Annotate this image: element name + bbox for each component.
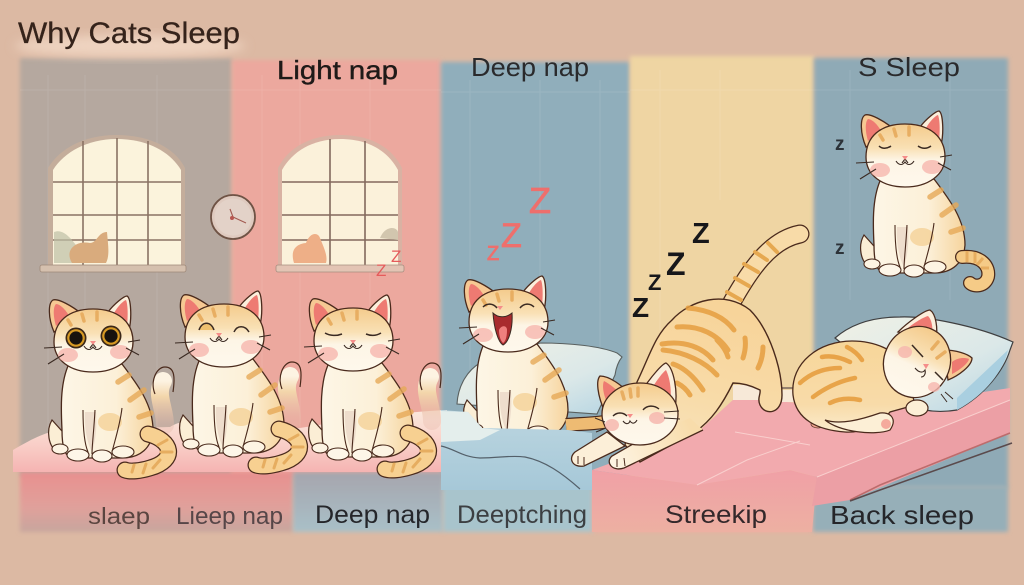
sleep letters by window: Z: [376, 261, 386, 280]
sleep letters: black: Z: [666, 246, 686, 282]
sleep letters: black: [632, 218, 710, 323]
tail: [727, 234, 800, 302]
sleep letters: red: [487, 180, 551, 265]
head: [872, 310, 972, 409]
heading: deep nap: Deep nap: [471, 52, 589, 82]
head: [595, 363, 680, 445]
near front leg: [609, 418, 703, 469]
panel: bottom strip middle: [293, 472, 443, 532]
tail: [962, 251, 989, 285]
panel: bottom strip right: [813, 486, 1008, 532]
sleep letters: top right: z: [835, 238, 844, 259]
icon: left eye: [66, 328, 86, 348]
caption: back sleep: Back sleep: [830, 500, 974, 530]
caption: lieep nap: Lieep nap: [176, 503, 283, 530]
tail: cat three back: [420, 363, 441, 421]
open mouth: [493, 313, 512, 345]
heading: sleep: S Sleep: [858, 52, 960, 82]
caption: sleep: slaep: [88, 503, 150, 529]
sleep letters: red: Z: [529, 180, 551, 221]
sleep letters: top right: [835, 134, 844, 259]
icon: wall clock: [211, 195, 255, 239]
cat: yawning: [459, 276, 568, 442]
cat: sitting on back sleep panel: [856, 111, 989, 285]
panel: back sleep column: [814, 58, 1008, 488]
panel: bottom strip deep: [443, 480, 593, 532]
body: [793, 341, 915, 432]
panel: awake column: [20, 58, 232, 476]
caption: deep nap: Deep nap: [315, 501, 430, 529]
pink foot: [811, 420, 825, 428]
body: [625, 299, 782, 462]
sleep letters: red: Z: [487, 243, 499, 265]
sleep letters by window: Z: [391, 247, 401, 266]
sleep letters: black: Z: [648, 270, 661, 295]
sleep letters by window: [376, 247, 401, 280]
sleep letters: red: Z: [501, 217, 522, 255]
panel: light nap column: [232, 60, 441, 476]
panel: bottom strip pink: [593, 480, 813, 532]
pillow: deep nap: [457, 343, 622, 414]
bed: pink mattress: [592, 385, 1012, 532]
cat: wide awake: [44, 296, 172, 473]
front paw: [906, 400, 928, 416]
window: right: [276, 135, 404, 272]
sleep letters: black: Z: [692, 218, 710, 250]
cushion: left shelf: [13, 410, 447, 472]
icon: right eye: [100, 326, 122, 346]
panel: deep nap column: [441, 62, 630, 490]
blanket: blue: [441, 410, 592, 490]
title glow: [15, 35, 245, 57]
cat: drowsy: [175, 291, 303, 468]
cat: light nap: [304, 295, 432, 472]
caption: streekip: Streekip: [665, 501, 767, 529]
cat: curled sleeping: [793, 310, 972, 433]
body stripes: [662, 308, 763, 395]
pillow: back sleep: [835, 317, 1013, 412]
tail: cat one back: [153, 367, 174, 425]
tail: yawning cat: [566, 422, 604, 425]
sleep letters: top right: z: [835, 134, 844, 155]
panel: stretching column: [630, 56, 814, 486]
window: left: [40, 135, 186, 272]
far front leg: [572, 432, 625, 466]
heading: light nap: Light nap: [277, 55, 398, 85]
caption: deeptching: Deeptching: [457, 501, 587, 529]
title: Why Cats Sleep: [18, 17, 240, 50]
tail: cat two back: [280, 362, 301, 420]
cat: stretching: [572, 234, 800, 469]
sleep letters: black: Z: [632, 292, 649, 323]
panel: bottom strip left: [20, 472, 293, 532]
hind leg: [825, 413, 893, 433]
